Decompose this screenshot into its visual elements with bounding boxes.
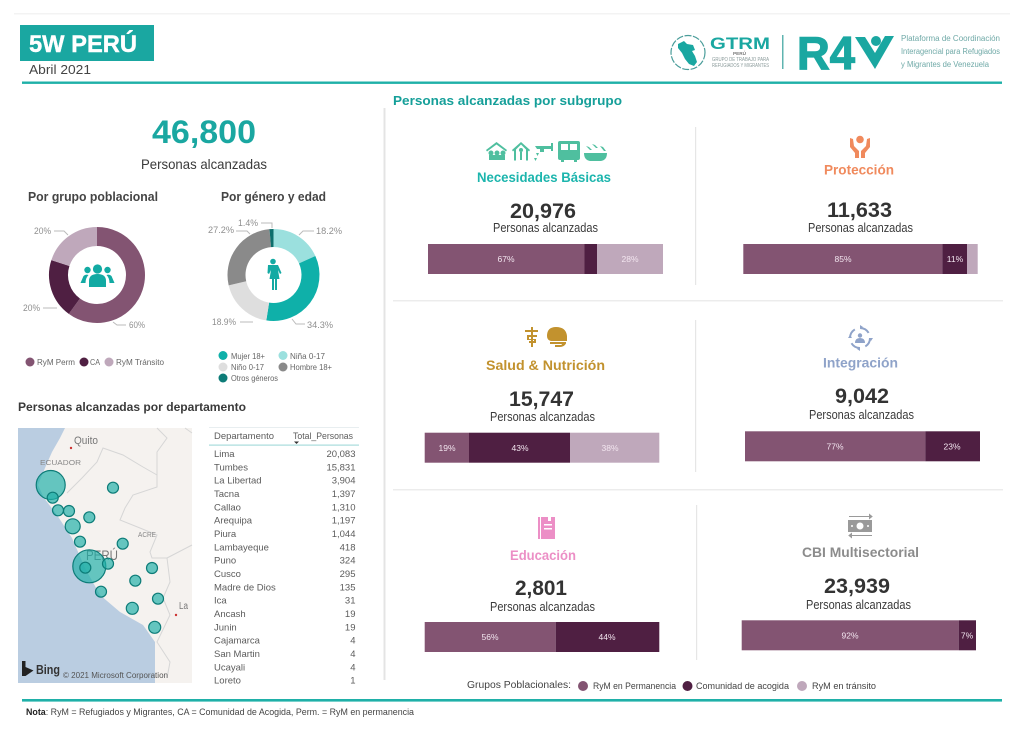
table: departamentos: Junin bbox=[214, 622, 237, 633]
icon: protection hands bbox=[850, 136, 870, 158]
stacked bar: proteccion: 11% bbox=[947, 254, 964, 264]
stacked bar: cbi: 7% bbox=[961, 630, 974, 640]
panel: cbi multisectorial: CBI Multisectorial bbox=[802, 544, 919, 560]
table: departamentos: Ucayali bbox=[214, 662, 245, 673]
donut chart: genero y edad: 1.4% bbox=[238, 218, 259, 229]
icon: notebook bbox=[538, 517, 555, 539]
donut chart: grupo poblacional bbox=[23, 226, 145, 331]
table: departamentos: 295 bbox=[340, 569, 356, 580]
stacked bar: integracion: 23% bbox=[943, 442, 961, 452]
panel: salud y nutricion: Personas alcanzadas bbox=[490, 410, 595, 424]
logo: GTRM: GRUPO DE TRABAJO PARA bbox=[712, 57, 770, 63]
panel: integracion bbox=[745, 325, 980, 461]
logo: R4V: R4 bbox=[797, 27, 855, 79]
stacked bar: educacion: 56% bbox=[481, 632, 499, 642]
stacked bar: cbi bbox=[742, 620, 976, 650]
icon: person bbox=[268, 259, 282, 290]
table: departamentos: Lambayeque bbox=[214, 542, 269, 553]
donut chart: genero y edad bbox=[208, 218, 343, 331]
table: departamentos: 15,831 bbox=[326, 462, 356, 473]
donut chart: grupo poblacional: 60% bbox=[129, 320, 145, 331]
icons: necesidades basicas bbox=[486, 141, 607, 162]
table: departamentos: Puno bbox=[214, 556, 236, 567]
logo tagline: Interagencial para Refugiados bbox=[901, 47, 1000, 56]
panel: total bbox=[141, 114, 267, 172]
panel: necesidades basicas: Necesidades Básicas bbox=[477, 169, 611, 185]
panel: necesidades basicas: Personas alcanzadas bbox=[493, 221, 598, 235]
map bubbles bbox=[36, 470, 164, 633]
donut chart: genero y edad: 18.2% bbox=[316, 226, 343, 237]
logo tagline: y Migrantes de Venezuela bbox=[901, 60, 990, 69]
legend: genero y edad: Niña 0-17 bbox=[290, 351, 325, 361]
stacked bar: necesidades basicas bbox=[428, 244, 663, 274]
stacked bar: salud: 38% bbox=[601, 443, 619, 453]
table: departamentos: San Martin bbox=[214, 649, 260, 660]
table: departamentos: Total_Personas bbox=[293, 431, 353, 442]
table: departamentos: Tacna bbox=[214, 489, 240, 500]
table: departamentos: Piura bbox=[214, 529, 237, 540]
table: departamentos: Tumbes bbox=[214, 462, 248, 473]
title block bbox=[20, 25, 154, 77]
table: departamentos: La Libertad bbox=[214, 476, 262, 487]
panel: necesidades basicas bbox=[428, 141, 663, 274]
donut chart: grupo poblacional: 20% bbox=[34, 226, 51, 237]
table: departamentos: 1,197 bbox=[332, 516, 356, 527]
table: departamentos: 4 bbox=[350, 662, 356, 673]
panel: educacion: Personas alcanzadas bbox=[490, 600, 595, 614]
map: departamentos: © 2021 Microsoft Corporation bbox=[63, 671, 168, 680]
table: departamentos: Lima bbox=[214, 449, 235, 460]
panel: total: 46,800 bbox=[152, 114, 256, 150]
table: departamentos: 19 bbox=[345, 609, 356, 620]
logo: GTRM bbox=[671, 34, 770, 70]
table: departamentos: Departamento bbox=[214, 431, 274, 442]
table: departamentos: Callao bbox=[214, 502, 241, 513]
table: departamentos: Arequipa bbox=[214, 516, 253, 527]
table: departamentos: 1,310 bbox=[332, 502, 356, 513]
legend: grupos poblacionales: RyM en Permanencia bbox=[593, 681, 676, 691]
panel: integracion: 9,042 bbox=[835, 384, 889, 408]
heading: subgrupo: Personas alcanzadas por subgrupo bbox=[393, 93, 622, 108]
legend: genero y edad bbox=[218, 351, 332, 383]
panel: educacion: Educación bbox=[510, 547, 576, 563]
panel: cbi multisectorial: Personas alcanzadas bbox=[806, 598, 911, 612]
table: departamentos: 4 bbox=[350, 636, 356, 647]
legend: genero y edad: Mujer 18+ bbox=[231, 351, 265, 361]
legend: grupo poblacional: CA bbox=[90, 357, 100, 367]
stacked bar: proteccion: 85% bbox=[834, 254, 852, 264]
table: departamentos: 31 bbox=[345, 596, 356, 607]
panel: educacion bbox=[425, 517, 659, 652]
heading: por departamento: Personas alcanzadas por departamento bbox=[18, 400, 246, 414]
donut chart: genero y edad: 34.3% bbox=[307, 320, 334, 331]
panel: cbi multisectorial bbox=[742, 514, 976, 650]
legend: genero y edad: Niño 0-17 bbox=[231, 362, 264, 372]
stacked bar: integracion bbox=[745, 431, 980, 461]
icons: salud bbox=[525, 327, 567, 347]
panel: proteccion: 11,633 bbox=[827, 198, 892, 222]
heading: por genero y edad: Por género y edad bbox=[221, 190, 326, 204]
stacked bar: integracion: 77% bbox=[826, 442, 844, 452]
legend: grupos poblacionales: RyM en tránsito bbox=[812, 681, 876, 691]
map: departamentos: Bing bbox=[36, 662, 60, 677]
table: departamentos: 20,083 bbox=[326, 449, 356, 460]
panel: educacion: 2,801 bbox=[515, 576, 567, 600]
map: departamentos: ECUADOR bbox=[40, 458, 82, 467]
logo tagline: Plataforma de Coordinación bbox=[901, 34, 1000, 43]
table: departamentos: Cajamarca bbox=[214, 636, 261, 647]
heading: por grupo poblacional: Por grupo poblacional bbox=[28, 190, 158, 204]
icon: integration bbox=[848, 325, 873, 351]
table: departamentos: 19 bbox=[345, 622, 356, 633]
panel: proteccion: Personas alcanzadas bbox=[808, 221, 913, 235]
legend: genero y edad: Otros géneros bbox=[231, 373, 278, 383]
panel: proteccion: Protección bbox=[824, 162, 894, 178]
table: departamentos: 324 bbox=[340, 556, 356, 567]
stacked bar: salud bbox=[425, 433, 659, 463]
logo: R4V bbox=[797, 27, 894, 79]
legend: grupo poblacional bbox=[26, 357, 164, 367]
map: departamentos: La bbox=[179, 601, 188, 612]
logo: GTRM: PERÚ bbox=[733, 50, 746, 56]
panel: integracion: Integración bbox=[823, 354, 898, 370]
table: departamentos: 1 bbox=[350, 676, 356, 687]
legend: grupos poblacionales: Comunidad de acogida bbox=[696, 681, 789, 691]
table: departamentos: 135 bbox=[340, 582, 356, 593]
logo: GTRM: GTRM bbox=[710, 34, 770, 53]
legend: genero y edad: Hombre 18+ bbox=[290, 362, 332, 372]
legend: grupo poblacional: RyM Tránsito bbox=[116, 357, 164, 367]
table: departamentos: 4 bbox=[350, 649, 356, 660]
map: departamentos bbox=[18, 428, 192, 683]
table: departamentos: Madre de Dios bbox=[214, 582, 276, 593]
title block: 5W PERÚ bbox=[29, 30, 137, 58]
table: departamentos: 1,397 bbox=[332, 489, 356, 500]
logo tagline bbox=[901, 34, 1000, 69]
panel: salud y nutricion bbox=[425, 327, 659, 463]
stacked bar: salud: 43% bbox=[511, 443, 529, 453]
footnote: Nota: RyM = Refugiados y Migrantes, CA = Comunidad de Acogida, Perm. = RyM en permanencia bbox=[26, 707, 415, 718]
table: departamentos: Cusco bbox=[214, 569, 241, 580]
panel: salud y nutricion: 15,747 bbox=[509, 387, 574, 411]
stacked bar: proteccion bbox=[743, 244, 978, 274]
table: departamentos bbox=[209, 427, 359, 687]
stacked bar: cbi: 92% bbox=[841, 630, 859, 640]
stacked bar: necesidades basicas: 67% bbox=[497, 254, 515, 264]
map: departamentos: ACRE bbox=[138, 532, 156, 539]
table: departamentos: Ica bbox=[214, 596, 227, 607]
table: departamentos: Loreto bbox=[214, 676, 241, 687]
title block: Abril 2021 bbox=[29, 62, 91, 77]
legend: grupo poblacional: RyM Perm bbox=[37, 357, 75, 367]
logo: GTRM: REFUGIADOS Y MIGRANTES bbox=[712, 63, 770, 69]
panel: integracion: Personas alcanzadas bbox=[809, 408, 914, 422]
icon: people bbox=[80, 264, 114, 287]
donut chart: genero y edad: 27.2% bbox=[208, 225, 235, 236]
panel: total: Personas alcanzadas bbox=[141, 156, 267, 172]
table: departamentos: 3,904 bbox=[332, 476, 356, 487]
table: departamentos: Ancash bbox=[214, 609, 246, 620]
panel: salud y nutricion: Salud & Nutrición bbox=[486, 357, 605, 373]
stacked bar: salud: 19% bbox=[438, 443, 456, 453]
map: departamentos: Quito bbox=[74, 435, 98, 447]
legend: grupos poblacionales: Grupos Poblacionales: bbox=[467, 680, 571, 691]
table: departamentos: 1,044 bbox=[332, 529, 356, 540]
donut chart: grupo poblacional: 20% bbox=[23, 303, 40, 314]
icon: cash transfer bbox=[848, 514, 872, 538]
panel: necesidades basicas: 20,976 bbox=[510, 199, 576, 223]
stacked bar: necesidades basicas: 28% bbox=[621, 254, 639, 264]
panel: cbi multisectorial: 23,939 bbox=[824, 574, 890, 598]
table: departamentos: 418 bbox=[340, 542, 356, 553]
donut chart: genero y edad: 18.9% bbox=[212, 317, 236, 328]
stacked bar: educacion bbox=[425, 622, 659, 652]
map: departamentos: PERÚ bbox=[86, 547, 118, 563]
stacked bar: educacion: 44% bbox=[598, 632, 616, 642]
legend: grupos poblacionales bbox=[467, 680, 876, 691]
panel: proteccion bbox=[743, 136, 978, 274]
